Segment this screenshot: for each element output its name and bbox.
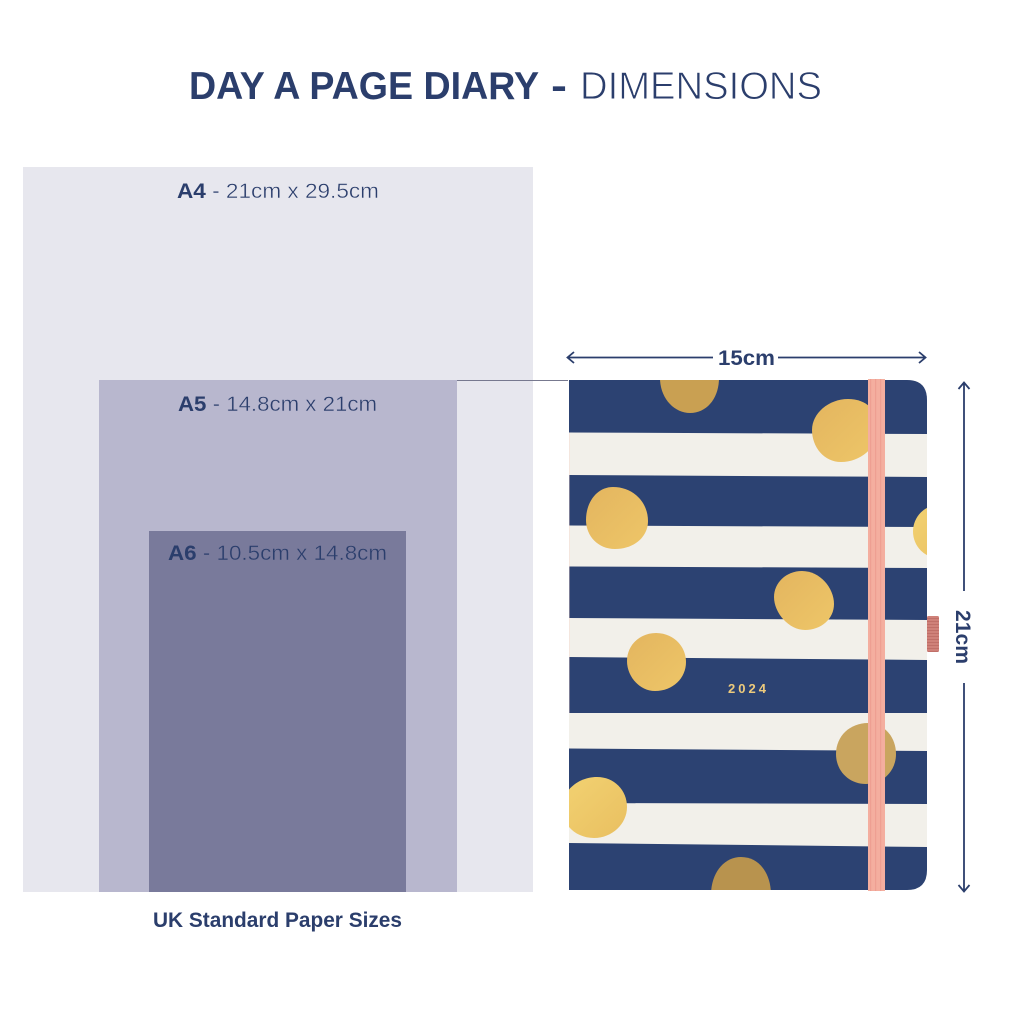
gold dots — [569, 380, 927, 890]
caption: paper sizes: UK Standard Paper Sizes — [153, 909, 402, 932]
title — [189, 65, 822, 108]
connector line: A5 to diary — [457, 380, 568, 382]
diary: striped cover — [569, 379, 939, 891]
cover stripes — [569, 380, 927, 890]
bookmark tab — [927, 616, 939, 652]
arrow: width 15cm — [568, 347, 926, 370]
arrow: height 21cm: 21cm — [951, 610, 974, 664]
label: A6 dimensions: A6 - 10.5cm x 14.8cm — [168, 542, 387, 565]
title: DIMENSIONS — [580, 65, 822, 108]
label: A5 dimensions: A5 - 14.8cm x 21cm — [178, 393, 377, 416]
title: - — [551, 65, 567, 108]
panel: A5 paper size — [99, 380, 457, 892]
title: DAY A PAGE DIARY — [189, 65, 539, 108]
arrow: height 21cm — [951, 382, 974, 892]
year: 2024 — [728, 681, 769, 696]
label: A4 dimensions: A4 - 21cm x 29.5cm — [177, 180, 379, 203]
panel: A6 paper size — [149, 531, 406, 892]
elastic band — [868, 379, 885, 891]
arrow: width 15cm: 15cm — [718, 347, 775, 370]
